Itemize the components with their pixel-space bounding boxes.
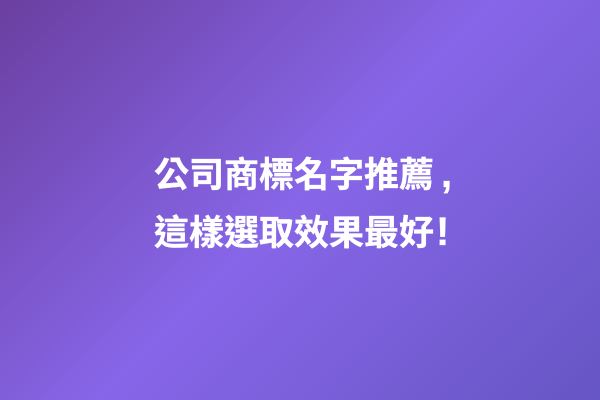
title line 2: 這樣選取效果最好! [154,210,449,254]
title [154,152,452,254]
title line 1: 公司商標名字推薦, [154,152,452,196]
